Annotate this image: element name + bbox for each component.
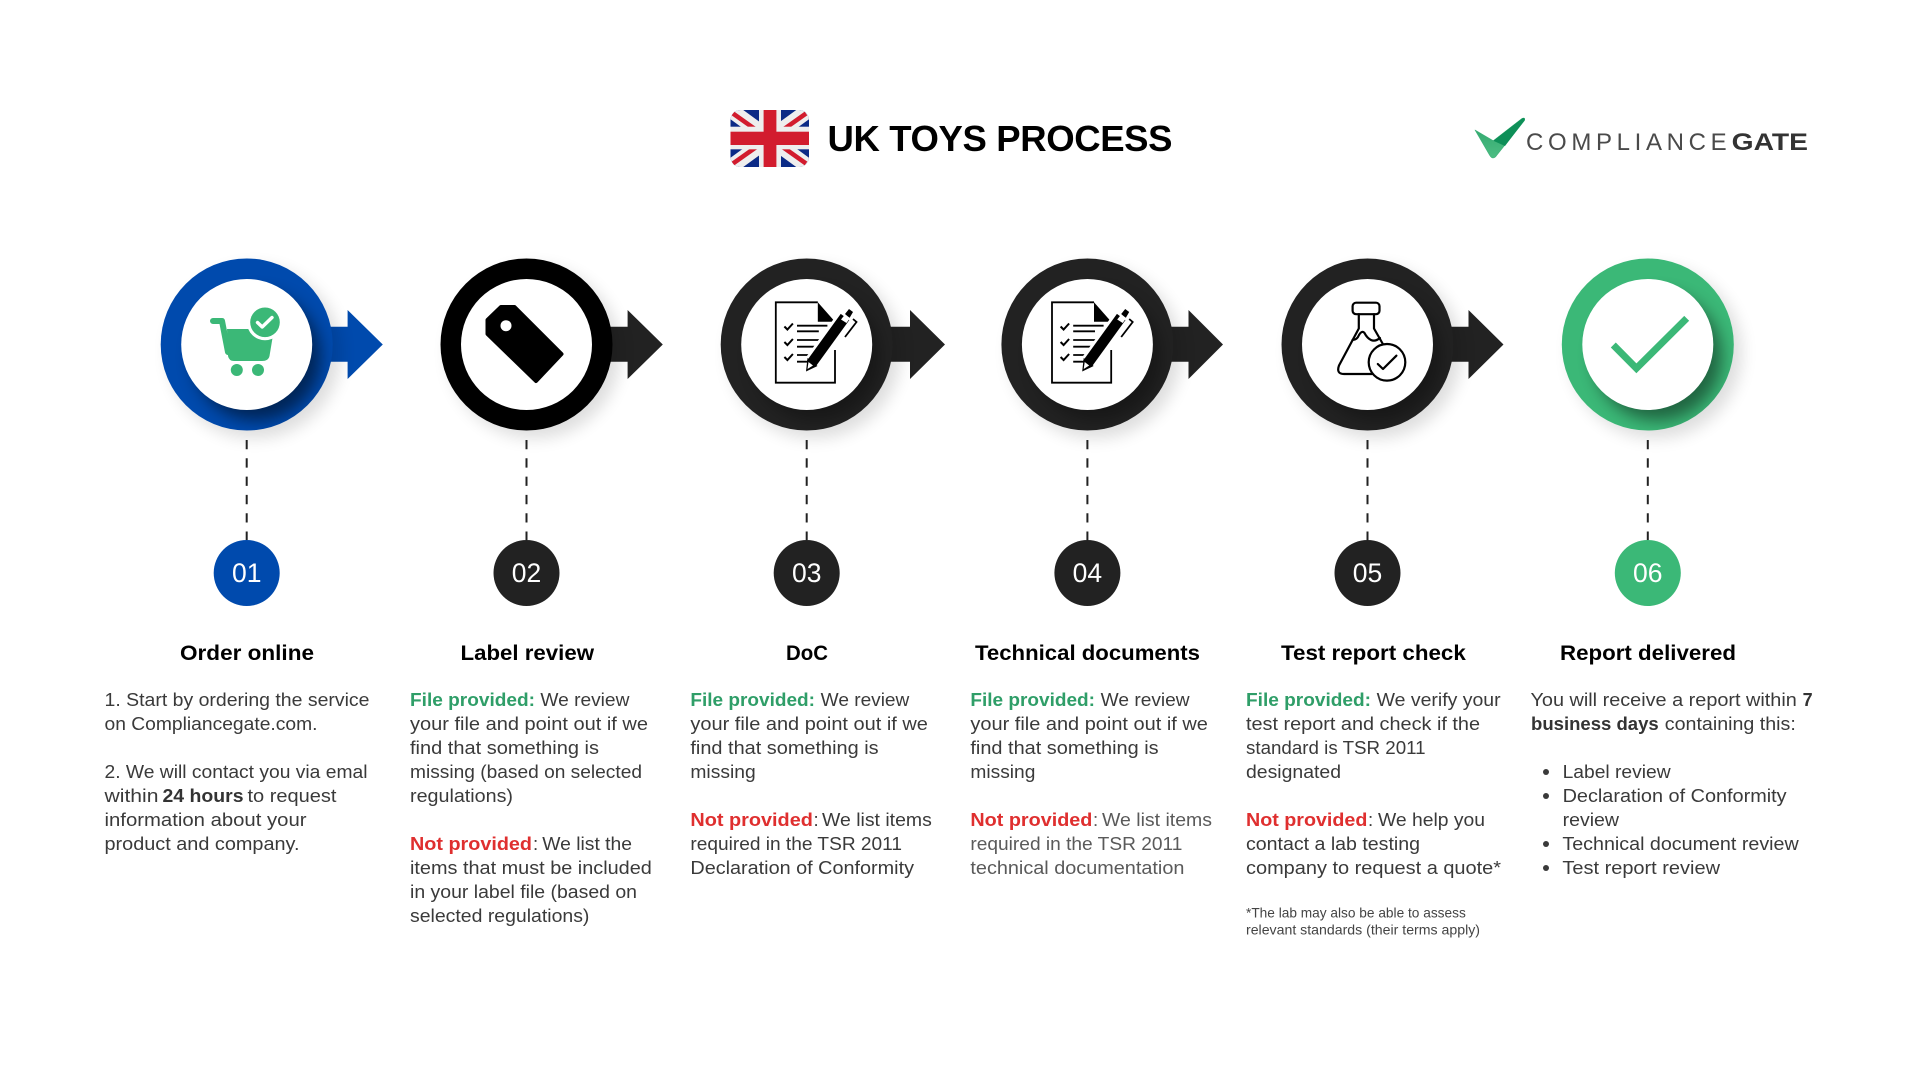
step 02: Label review (410, 258, 663, 926)
text block: Declaration of Conformity (690, 857, 915, 878)
text block: We list items (1102, 809, 1212, 830)
heading: Test report check (1281, 641, 1466, 665)
number badge 04: 04 (1073, 558, 1102, 588)
text block (970, 689, 1212, 878)
text block: required in the TSR 2011 (970, 833, 1182, 854)
number badge 01: 01 (232, 558, 261, 588)
text block: Not provided (690, 809, 813, 830)
text block: We list items (822, 809, 932, 830)
text block: 7 (1803, 689, 1813, 710)
heading: Label review (460, 641, 594, 665)
text block: We verify your (1377, 689, 1501, 710)
footnote: *The lab may also be able to assess (1246, 906, 1466, 921)
connector (246, 440, 248, 540)
text block: find that something is (970, 737, 1159, 758)
icon: UK flag (730, 110, 809, 167)
text block: File provided: (970, 689, 1095, 710)
text block: missing (970, 761, 1035, 782)
connector (1366, 440, 1368, 540)
text block: technical documentation (970, 857, 1184, 878)
icon: document with pen (776, 302, 856, 383)
text block (690, 689, 932, 878)
text block: We review (1101, 689, 1190, 710)
text block: File provided: (410, 689, 535, 710)
text block: missing (based on selected (410, 761, 642, 782)
text block: Not provided (1246, 809, 1367, 830)
number badge 05: 05 (1353, 558, 1382, 588)
bullet list: Test report review (1562, 857, 1721, 878)
text block: your file and point out if we (970, 713, 1208, 734)
text block: items that must be included (410, 857, 652, 878)
text block: We list the (542, 833, 632, 854)
arrow (1445, 310, 1504, 379)
footnote: relevant standards (their terms apply) (1246, 923, 1480, 938)
logo: ComplianceGate (1475, 118, 1808, 158)
ring (1282, 258, 1462, 438)
heading: Order online (180, 641, 314, 665)
step 05: Test report check (1246, 258, 1504, 938)
step 01: Order online (103, 258, 383, 854)
text block: : (1093, 809, 1098, 830)
ring (1562, 258, 1742, 438)
text block: We help you (1378, 809, 1485, 830)
bullet list: Declaration of Conformity (1563, 785, 1787, 806)
icon: logo check mark (1475, 118, 1525, 158)
text block: test report and check if the (1246, 713, 1480, 734)
connector (1086, 440, 1088, 540)
text block: your file and point out if we (690, 713, 928, 734)
text block: missing (690, 761, 756, 782)
text block: : (1368, 809, 1373, 830)
icon: check mark (1613, 318, 1687, 368)
text block: 2. We will contact you via emal (104, 761, 368, 782)
text block: on Compliancegate.com. (104, 713, 318, 734)
heading: Technical documents (975, 641, 1200, 665)
number badge 03 (774, 540, 840, 606)
ring (440, 258, 620, 438)
step 03: DoC (690, 258, 945, 878)
text block: required in the TSR 2011 (690, 833, 902, 854)
number badge 03: 03 (792, 558, 821, 588)
arrow (325, 310, 383, 379)
number badge 02: 02 (512, 558, 541, 588)
step 04: Technical documents (970, 258, 1223, 878)
logo wordmark: COMPLIANCE (1526, 129, 1727, 156)
step 06: Report delivered (1530, 258, 1813, 878)
connector (526, 440, 528, 540)
ring (161, 258, 341, 438)
text block: You will receive a report within (1530, 689, 1797, 710)
text block: contact a lab testing (1246, 833, 1420, 854)
arrow (1165, 310, 1223, 379)
text block: 1. Start by ordering the service (104, 689, 370, 710)
footnote (1246, 906, 1480, 938)
number badge 05 (1334, 540, 1400, 606)
text block: company to request a quote* (1246, 857, 1501, 878)
text block: business days (1531, 713, 1659, 734)
text block: We review (540, 689, 630, 710)
number badge 02 (494, 540, 560, 606)
heading: Report delivered (1560, 641, 1736, 665)
icon: cart (213, 304, 283, 376)
text block: Not provided (410, 833, 532, 854)
text block: find that something is (410, 737, 599, 758)
bullet list: review (1563, 809, 1620, 830)
text block: We review (821, 689, 910, 710)
connector (1647, 440, 1649, 540)
ring (1001, 258, 1181, 438)
text block: 24 hours (162, 785, 244, 806)
text block: File provided: (690, 689, 815, 710)
text block: information about your (104, 809, 306, 830)
arrow (885, 310, 945, 379)
icon: tag (488, 307, 562, 381)
number badge 06 (1615, 540, 1681, 606)
text block: File provided: (1246, 689, 1371, 710)
arrow (605, 310, 663, 379)
logo wordmark: GATE (1732, 129, 1808, 156)
number badge 04 (1054, 540, 1120, 606)
text block: designated (1246, 761, 1341, 782)
text block: within (103, 785, 158, 806)
text block: to request (248, 785, 337, 806)
text block: product and company. (104, 833, 300, 854)
text block: : (814, 809, 819, 830)
number badge 01 (214, 540, 280, 606)
text block (1246, 689, 1501, 878)
ring (721, 258, 901, 438)
text block (410, 689, 652, 926)
number badge 06: 06 (1633, 558, 1663, 588)
text block: standard is TSR 2011 (1246, 737, 1426, 758)
text block (1530, 689, 1813, 878)
bullet list: Technical document review (1562, 833, 1799, 854)
text block: find that something is (690, 737, 879, 758)
text block (103, 689, 369, 854)
text block: containing this: (1665, 713, 1796, 734)
text block: in your label file (based on (410, 881, 637, 902)
bullet list (1543, 761, 1799, 878)
text block: selected regulations) (410, 905, 589, 926)
text block: regulations) (410, 785, 513, 806)
text block: : (533, 833, 538, 854)
icon: document with pen (1052, 302, 1133, 383)
bullet list: Label review (1563, 761, 1671, 782)
connector (806, 440, 808, 540)
icon: flask with check (1338, 303, 1405, 381)
text block: Not provided (970, 809, 1092, 830)
text block: your file and point out if we (410, 713, 648, 734)
heading: DoC (786, 641, 828, 665)
title: UK TOYS PROCESS (828, 118, 1172, 159)
